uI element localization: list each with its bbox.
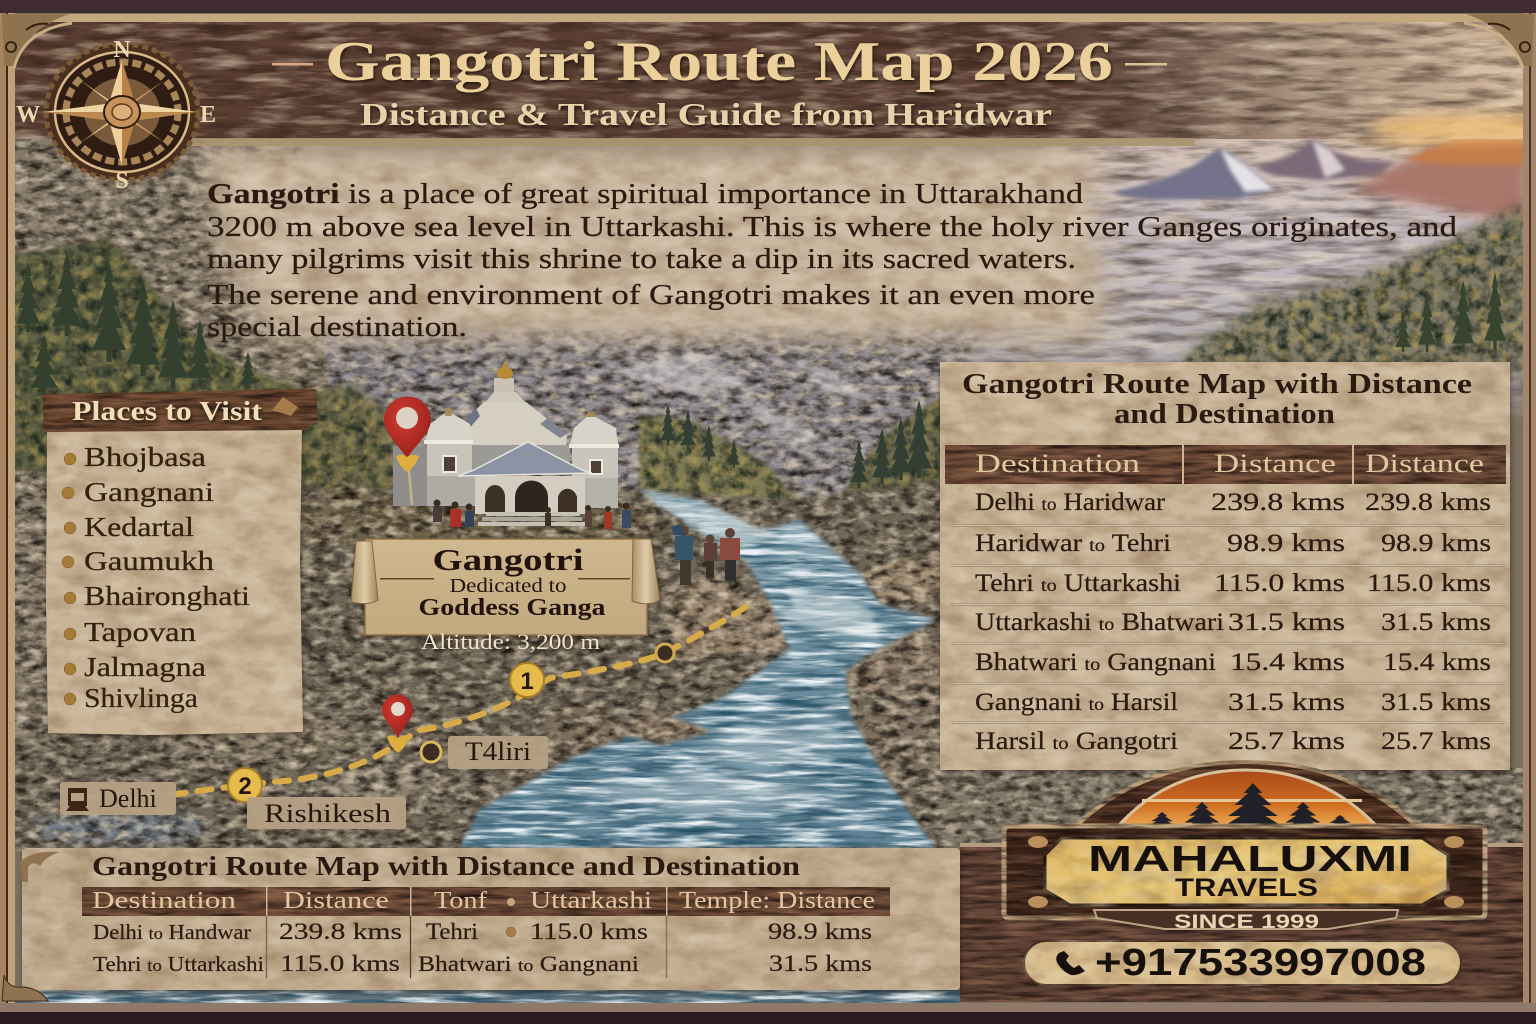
title: Gangotri Route Map 2026 — [325, 31, 1113, 93]
corner ornament top right — [1464, 14, 1534, 68]
left wing — [393, 446, 427, 506]
table heading — [962, 368, 1472, 430]
compass rose: N — [113, 37, 131, 63]
intro text: The serene and environment of Gangotri makes it an even more — [207, 280, 1095, 311]
title flourish right — [1125, 63, 1167, 66]
table header row — [945, 445, 1506, 484]
subtitle: Distance & Travel Guide from Haridwar — [360, 96, 1052, 132]
sunlit slope — [1350, 120, 1525, 225]
bottom table rows: 115.0 kms — [530, 919, 648, 944]
waypoint marker lower — [421, 742, 441, 762]
temple — [305, 361, 670, 545]
table rows: 31.5 kms — [1228, 609, 1345, 636]
river — [460, 490, 935, 848]
hikers — [672, 524, 740, 585]
bottom table rows: 115.0 kms — [280, 951, 400, 976]
table rows: Delhi to Haridwar — [975, 489, 1166, 516]
heading plaque: Places to Visit — [72, 396, 262, 426]
table rows: 31.5 kms — [1381, 609, 1491, 636]
heading plaque — [42, 389, 318, 432]
finial — [486, 361, 525, 402]
list items: Shivlinga — [84, 683, 198, 713]
waypoint marker upper — [656, 644, 674, 662]
logo board — [1004, 826, 1485, 918]
bottom table header: Distance — [283, 888, 389, 914]
sunset and trees — [1113, 770, 1382, 833]
title flourish left — [272, 63, 313, 66]
table rows: 25.7 kms — [1381, 728, 1491, 755]
portico roof — [458, 442, 592, 476]
left roll — [351, 541, 378, 604]
pilgrims — [433, 500, 631, 529]
left tower — [424, 408, 475, 506]
table rows: 115.0 kms — [1214, 570, 1345, 597]
sky and far mountains, right — [960, 94, 1536, 400]
table heading: Gangotri Route Map with Distance — [962, 368, 1472, 400]
table rows: Haridwar to Tehri — [975, 530, 1171, 557]
list items: Bhaironghati — [84, 581, 250, 611]
table corner ornament left — [20, 852, 60, 882]
bottom table header: Destination — [92, 888, 236, 914]
table rows: 15.4 kms — [1230, 649, 1345, 676]
scroll: Gangotri — [351, 539, 660, 635]
header band — [14, 22, 1536, 146]
bottom table rows: 239.8 kms — [279, 919, 402, 944]
table rows: 25.7 kms — [1228, 728, 1345, 755]
bottom table header: Tonf — [434, 888, 487, 914]
scroll: Gangotri: Dedicated to — [450, 575, 566, 597]
compass rose: S — [115, 168, 129, 194]
near hillside — [1180, 205, 1525, 370]
table rows: Harsil to Gangotri — [975, 728, 1178, 755]
panel: route table bottom — [2, 848, 960, 1001]
bottom table header: Temple: Distance — [679, 888, 875, 914]
number marker 1: 1 — [520, 668, 534, 695]
number marker 2: 2 — [238, 773, 252, 800]
list items: Tapovan — [84, 617, 197, 647]
distant peak right — [1255, 140, 1395, 180]
compass rose — [16, 37, 216, 194]
list items: Jalmagna — [84, 652, 206, 682]
bottom-right ledge — [14, 768, 1525, 1003]
bottom table header — [82, 887, 890, 916]
table rows: 98.9 kms — [1227, 530, 1345, 557]
bottom table rows: 31.5 kms — [769, 951, 872, 976]
rocks in river — [540, 700, 712, 750]
label: Rishikesh: Rishikesh — [264, 799, 391, 828]
list items — [62, 442, 250, 713]
table rows: 115.0 kms — [1367, 570, 1491, 597]
table rows: Uttarkashi to Bhatwari — [975, 609, 1224, 636]
bottom table heading: Gangotri Route Map with Distance and Destination — [92, 851, 800, 881]
compass rose: E — [200, 102, 216, 128]
list items: Bhojbasa — [84, 442, 206, 472]
number marker 1 — [510, 663, 544, 697]
location pin: Gangotri — [384, 396, 431, 505]
table rows — [952, 489, 1504, 755]
table rows: 98.9 kms — [1381, 530, 1491, 557]
logo: Mahaluxmi Travels — [1004, 762, 1485, 985]
scroll: Gangotri: Goddess Ganga — [418, 595, 606, 621]
panel: places to visit — [42, 389, 318, 735]
bottom table rows: 98.9 kms — [768, 919, 872, 944]
intro text: Gangotri is a place of great spiritual importance in Uttarakhand — [207, 179, 1083, 210]
compass rose: W — [16, 102, 40, 128]
table rows: 31.5 kms — [1228, 689, 1345, 716]
label: T4liri — [448, 736, 548, 769]
panel: route table right — [940, 362, 1510, 770]
logo rivets — [1028, 836, 1464, 908]
bottom table rows — [93, 916, 872, 978]
bottom table rows: Delhi to Handwar — [93, 920, 251, 944]
bottom table rows: Tehri — [426, 919, 478, 944]
central dome — [455, 402, 567, 448]
corner ornament top left — [2, 14, 72, 68]
label: Rishikesh — [247, 797, 406, 829]
since banner — [1094, 910, 1398, 933]
number marker 2 — [228, 768, 262, 802]
label: Delhi: Delhi — [99, 784, 157, 813]
intro text: special destination. — [207, 312, 467, 343]
gold plaque — [1045, 838, 1448, 905]
central wall — [470, 445, 570, 475]
table rows: Gangnani to Harsil — [975, 689, 1178, 716]
phone pill: +917533997008 — [1095, 942, 1426, 984]
phone pill — [1024, 941, 1461, 985]
table heading: and Destination — [1114, 398, 1335, 430]
table rows: 239.8 kms — [1365, 489, 1491, 516]
table rows: Tehri to Uttarkashi — [975, 570, 1181, 597]
intro text — [207, 179, 1457, 343]
table header row: Distance — [1365, 449, 1484, 478]
logo arch — [1072, 762, 1420, 830]
since banner: SINCE 1999 — [1174, 912, 1319, 933]
label: Delhi — [60, 782, 176, 815]
label: T4liri: T4liri — [465, 737, 531, 766]
paper panel behind intro — [200, 146, 1105, 340]
route line — [172, 605, 748, 795]
parchment list — [46, 428, 303, 735]
distant peak left — [1112, 148, 1275, 200]
altitude label: Altitude: 3,200 m — [421, 629, 600, 654]
scroll: Gangotri: Gangotri — [432, 542, 584, 577]
location pin: Rishikesh route — [382, 694, 413, 753]
central mountain highlights — [310, 350, 945, 560]
frame corner ornament bottom-left — [2, 975, 48, 1001]
table rows: 15.4 kms — [1383, 649, 1491, 676]
icon: phone — [1056, 951, 1085, 975]
table rows: Bhatwari to Gangnani — [975, 649, 1216, 676]
list items: Gaumukh — [84, 546, 215, 576]
left hillside — [14, 125, 360, 740]
right tower — [569, 412, 619, 508]
central mountains base — [300, 300, 1140, 510]
table rows: 239.8 kms — [1211, 489, 1345, 516]
logo subtitle: TRAVELS — [1175, 874, 1318, 902]
bottom table rows: Bhatwari to Gangnani — [418, 951, 639, 976]
table header row: Destination — [975, 449, 1140, 478]
steps — [478, 512, 586, 526]
intro text: many pilgrims visit this shrine to take a dip in its sacred waters. — [207, 244, 1076, 275]
bottom table rows: Tehri to Uttarkashi — [93, 952, 264, 976]
portico — [475, 476, 585, 514]
list items: Kedartal — [84, 512, 194, 542]
intro text: 3200 m above sea level in Uttarkashi. This is where the holy river Ganges originates, and — [207, 212, 1457, 243]
list items: Gangnani — [84, 477, 214, 507]
rocky banks — [14, 480, 945, 850]
ground slope — [305, 480, 670, 545]
right roll — [632, 539, 660, 604]
bottom table header: Uttarkashi — [530, 888, 652, 914]
table rows: 31.5 kms — [1381, 689, 1491, 716]
table header row: Distance — [1214, 449, 1336, 478]
logo name: MAHALUXMI — [1088, 838, 1412, 879]
white water rapids — [560, 498, 880, 815]
